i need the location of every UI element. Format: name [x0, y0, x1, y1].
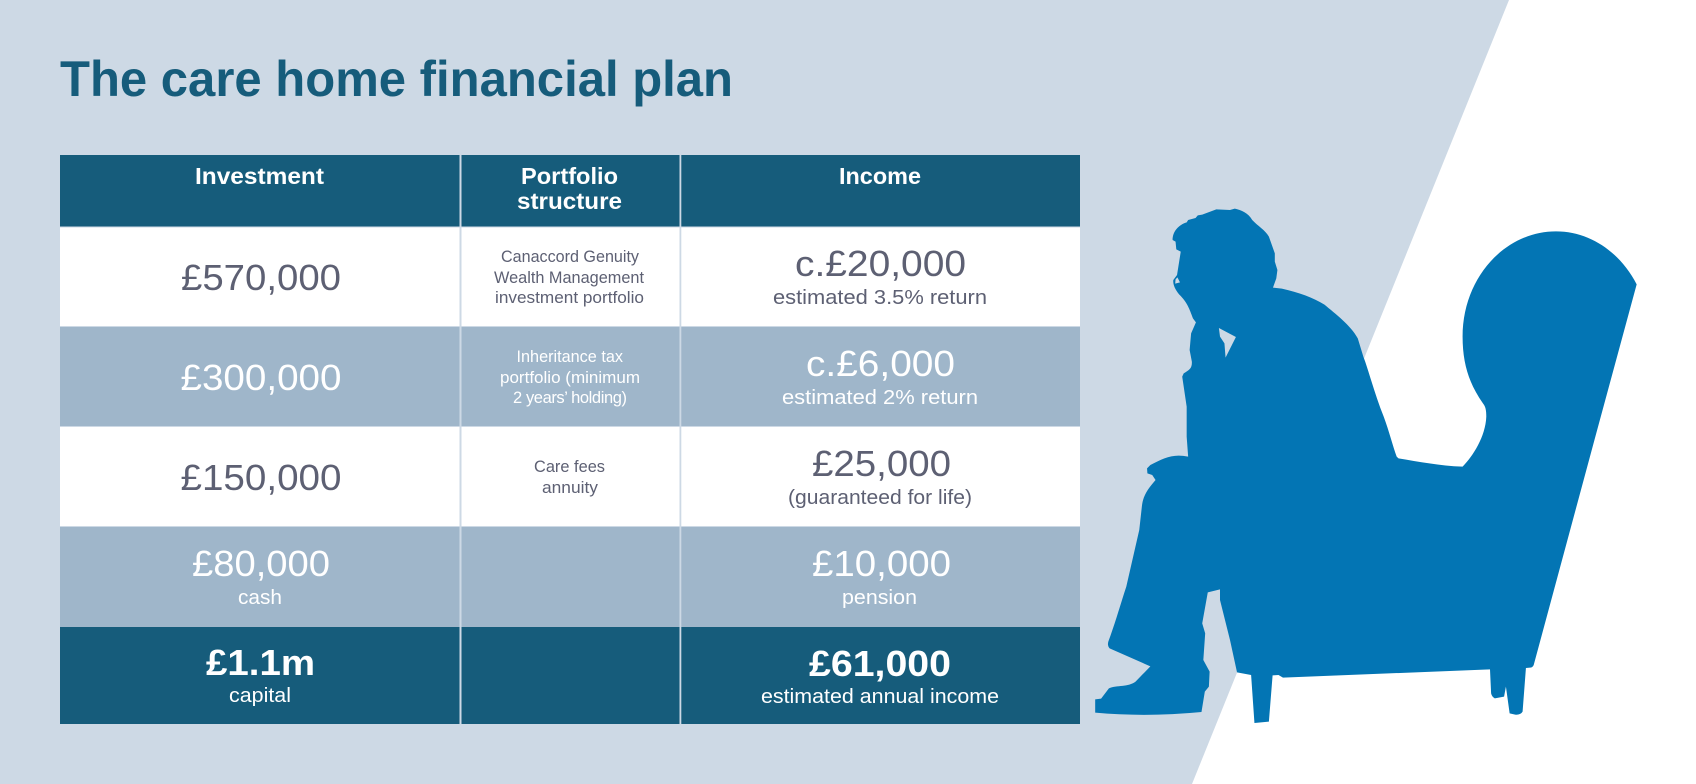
income value [773, 243, 987, 309]
row: £150,000 [60, 427, 1080, 526]
investment value: cash [238, 586, 282, 609]
portfolio description: Care fees [534, 458, 605, 476]
total income: £61,000 [809, 643, 951, 684]
income value: estimated 3.5% return [773, 286, 987, 309]
icon: silhouette of man seated in wing chair [1095, 209, 1637, 723]
investment value: £80,000 [192, 543, 330, 584]
heading: investment: Investment [195, 163, 324, 189]
total capital: capital [229, 684, 291, 707]
portfolio description: Canaccord Genuity [501, 248, 640, 266]
row: £570,000 [60, 228, 1080, 326]
investment value [192, 543, 330, 609]
investment value: £150,000 [180, 457, 342, 498]
income value: c.£20,000 [795, 243, 966, 284]
income value [788, 443, 972, 509]
portfolio description: Wealth Management [494, 269, 644, 287]
total income: estimated annual income [761, 685, 999, 708]
income value: c.£6,000 [806, 343, 955, 384]
income value: estimated 2% return [782, 386, 978, 409]
portfolio description [494, 248, 644, 307]
income value [812, 543, 951, 609]
portfolio description: annuity [542, 479, 599, 497]
income value [782, 343, 978, 409]
total income [761, 643, 999, 708]
portfolio description [534, 458, 605, 497]
panel: financial plan table [60, 155, 1080, 724]
row: £80,000 cash [60, 527, 1080, 627]
portfolio description: investment portfolio [495, 289, 644, 307]
total capital [206, 642, 315, 707]
income value: pension [842, 586, 917, 609]
heading: portfolio structure: Portfolio [521, 163, 618, 189]
investment value: £570,000 [181, 257, 341, 298]
title: The care home financial plan [60, 51, 733, 107]
portfolio description [500, 348, 640, 407]
heading: portfolio structure [517, 163, 622, 214]
portfolio description: Inheritance tax [516, 348, 624, 366]
portfolio description: portfolio (minimum [500, 369, 640, 387]
heading: portfolio structure: structure [517, 188, 622, 214]
table header row [60, 155, 1080, 226]
total capital: £1.1m [206, 642, 315, 683]
investment value: £300,000 [180, 357, 342, 398]
row: £300,000 [60, 327, 1080, 426]
row: totals [60, 627, 1080, 724]
heading: income: Income [839, 163, 921, 189]
income value: (guaranteed for life) [788, 486, 972, 509]
income value: £25,000 [812, 443, 951, 484]
portfolio description: 2 years’ holding) [513, 389, 627, 407]
income value: £10,000 [812, 543, 951, 584]
